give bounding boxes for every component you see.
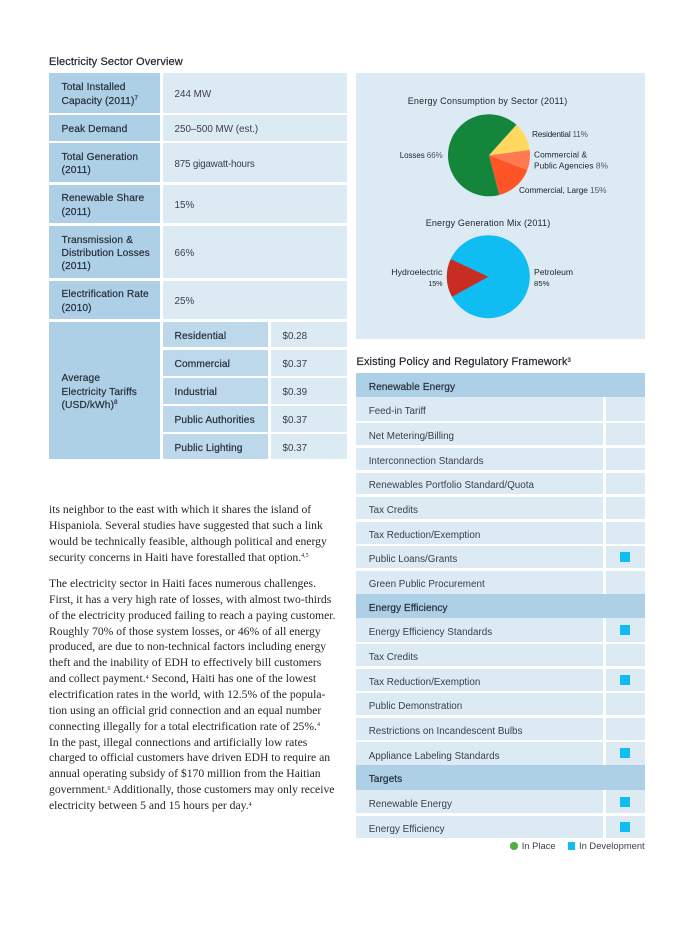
tariff: industrial: $0.39 [282, 387, 307, 398]
row: transmission and distribution losses: 66% [174, 248, 194, 259]
panel: pie charts [356, 73, 645, 339]
section header: targets [356, 765, 645, 790]
tariff: public lighting: $0.37 [282, 443, 307, 454]
legend marker: in development [568, 842, 575, 850]
policy row: net metering [356, 423, 645, 445]
policy row: tax reduction [356, 669, 645, 691]
tariff: commercial: $0.37 [282, 359, 307, 370]
row: transmission and distribution losses [49, 226, 347, 278]
policy row: tax reduction: Tax Reduction/Exemption [369, 530, 480, 541]
policy row: tax credits: Tax Credits [369, 652, 418, 663]
label: commercial large: Commercial, Large 15% [519, 185, 607, 195]
heading: Existing Policy and Regulatory Framework: Existing Policy and Regulatory Framework3 [356, 356, 571, 368]
policy row: energy efficiency target [356, 816, 645, 838]
row: total installed capacity [49, 73, 347, 113]
tariff: commercial: Commercial [174, 359, 230, 370]
policy row: restrictions on incandescent bulbs: Restrictions on Incandescent Bulbs [369, 726, 522, 737]
row: transmission and distribution losses: Transmission & Distribution Losses (2011) [62, 235, 150, 272]
label: residential: Residential 11% [532, 129, 589, 139]
text block: paragraph on Hispaniola link: its neighbor to the east with which it shares the island of Hispaniola. Several studies have suggested that such a link would be technically feasible, although political and energy security concerns in Haiti have forestalled that option.4,5 [49, 503, 327, 564]
row: total generation: 875 gigawatt-hours [174, 159, 255, 170]
policy row: interconnection standards [356, 448, 645, 470]
row: peak demand: 250–500 MW (est.) [174, 124, 258, 135]
heading: Electricity Sector Overview: Electricity Sector Overview [49, 56, 183, 68]
tariffs label [49, 322, 160, 459]
row: renewable share: 15% [174, 200, 194, 211]
chart title: energy consumption: Energy Consumption by Sector (2011) [408, 96, 567, 106]
policy row: public loans and grants: Public Loans/Grants [369, 554, 457, 565]
tariff: public authorities [163, 406, 347, 432]
row: total generation [49, 143, 347, 182]
section header: targets: Targets [369, 774, 402, 785]
legend [510, 840, 645, 851]
label: commercial and public agencies: Public Agencies 8% [534, 160, 609, 170]
policy row: green public procurement: Green Public Procurement [369, 579, 485, 590]
policy row: appliance labeling standards: Appliance Labeling Standards [369, 750, 500, 762]
section header: energy efficiency: Energy Efficiency [369, 603, 448, 614]
policy row: public loans and grants [356, 546, 645, 568]
row: peak demand [49, 115, 347, 141]
policy row: public demonstration: Public Demonstration [369, 701, 462, 712]
tariff: public lighting: Public Lighting [174, 443, 243, 454]
label: commercial and public agencies [534, 150, 609, 170]
tariff: public authorities: $0.37 [282, 415, 307, 426]
pie chart: energy generation mix [447, 235, 530, 318]
text block: paragraph on electricity sector challenges: The electricity sector in Haiti faces numerous challenges. First, it has a very high rate of losses, with almost two-thirds of the electricity produced failing to reach a paying customer. Roughly 70% of those system losses, or 46% of all energy produced, are due to non-technical factors including energy theft and the inability of EDH to effectively bill customers and collect payment.4 Second, Haiti has one of the lowest electrification rates in the world, with 12.5% of the popula- tion using an official grid connection and an equal number connecting illegally for a total electrification rate of 25%.4 In the past, illegal connections and artificially low rates charged to official customers have driven EDH to require an annual operating subsidy of $170 million from the Haitian government.6 Additionally, those customers may only receive electricity between 5 and 15 hours per day.4 [49, 577, 335, 812]
policy row: renewables portfolio standard: Renewables Portfolio Standard/Quota [369, 480, 534, 491]
row: total generation: Total Generation (2011) [62, 152, 138, 176]
label: petroleum: 85% [534, 279, 550, 288]
policy row: tax reduction: Tax Reduction/Exemption [369, 677, 480, 688]
policy row: renewable energy target: Renewable Energy [369, 798, 452, 810]
label: commercial and public agencies: Commercial & [534, 150, 587, 160]
policy row: renewable energy target [356, 790, 645, 813]
row: electrification rate: 25% [174, 296, 194, 307]
row: electrification rate: Electrification Rate (2010) [62, 289, 149, 314]
policy row: feed-in tariff [356, 397, 645, 421]
tariff: industrial [163, 378, 347, 404]
table: policy and regulatory framework [356, 373, 645, 838]
tariff: public authorities: Public Authorities [174, 415, 255, 426]
chart title: generation mix: Energy Generation Mix (2011) [426, 218, 550, 228]
policy row: energy efficiency standards [356, 618, 645, 642]
section header: renewable energy [356, 373, 645, 397]
policy row: tax credits [356, 644, 645, 666]
row: peak demand: Peak Demand [62, 124, 127, 135]
label: losses: Losses 66% [400, 151, 443, 160]
row: renewable share: Renewable Share (2011) [62, 193, 144, 218]
policy row: energy efficiency target: Energy Efficiency [369, 824, 445, 835]
label: petroleum: Petroleum [534, 267, 573, 277]
section header: renewable energy: Renewable Energy [369, 382, 455, 393]
policy row: feed-in tariff: Feed-in Tariff [369, 406, 426, 417]
policy row: renewables portfolio standard [356, 473, 645, 494]
legend marker: in place [510, 842, 518, 850]
row: total installed capacity: Total Installed Capacity (2011)7 [62, 82, 138, 107]
label: hydroelectric: Hydroelectric [391, 267, 443, 277]
label: hydroelectric [391, 267, 443, 288]
row: electrification rate [49, 281, 347, 319]
policy row: green public procurement [356, 571, 645, 594]
section header: energy efficiency [356, 594, 645, 618]
tariff: residential: $0.28 [282, 331, 307, 342]
policy row: net metering: Net Metering/Billing [369, 431, 454, 442]
tariff: residential: Residential [174, 331, 226, 342]
policy row: appliance labeling standards [356, 742, 645, 765]
label: petroleum [534, 267, 573, 288]
tariff: residential [163, 322, 347, 347]
policy row: interconnection standards: Interconnection Standards [369, 456, 484, 467]
table: electricity sector overview [49, 73, 347, 459]
tariff: commercial [163, 350, 347, 376]
label: hydroelectric: 15% [428, 279, 443, 288]
tariffs label: Average Electricity Tariffs (USD/kWh)8 [62, 373, 137, 411]
tariff: industrial: Industrial [174, 387, 217, 398]
legend text: in development: In Development [579, 840, 645, 851]
policy row: tax credits: Tax Credits [369, 505, 418, 516]
policy row: public demonstration [356, 693, 645, 715]
row group: average electricity tariffs [49, 322, 347, 459]
policy row: tax reduction [356, 522, 645, 544]
policy row: tax credits [356, 497, 645, 519]
tariff: public lighting [163, 434, 347, 459]
row: renewable share [49, 185, 347, 223]
pie chart: energy consumption by sector [448, 114, 530, 196]
legend text: in place: In Place [522, 840, 556, 851]
policy row: restrictions on incandescent bulbs [356, 718, 645, 740]
policy row: energy efficiency standards: Energy Efficiency Standards [369, 627, 492, 638]
row: total installed capacity: 244 MW [174, 89, 211, 100]
